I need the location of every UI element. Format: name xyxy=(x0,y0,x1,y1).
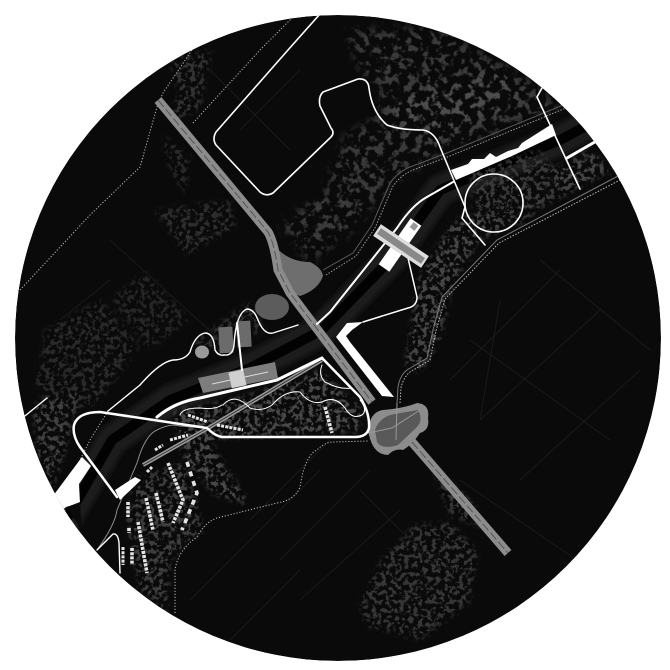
highway xyxy=(158,100,508,553)
white entry band xyxy=(55,457,91,509)
street network lines xyxy=(60,70,650,640)
river channel xyxy=(65,124,586,520)
white wedge xyxy=(336,322,394,397)
dotted paths xyxy=(20,18,368,613)
dark entry wedge xyxy=(67,502,82,526)
pavilion building xyxy=(198,362,278,393)
cross-shaped bridge xyxy=(377,222,425,268)
diagonal lane road xyxy=(143,360,322,465)
white terraced building band xyxy=(451,124,556,180)
white paths xyxy=(20,14,600,573)
tennis courts xyxy=(218,321,252,353)
vegetation: forest north of river xyxy=(280,28,560,262)
white triangle landing xyxy=(115,477,141,500)
roundabout xyxy=(368,403,428,455)
junction pond xyxy=(255,294,289,320)
junction plaza xyxy=(279,250,323,296)
vegetation: west slope, south bank, east bank xyxy=(32,50,612,640)
river-side double paths xyxy=(323,90,622,403)
grey lane west xyxy=(97,425,205,550)
small pond xyxy=(195,346,209,358)
river corridor glow xyxy=(58,114,594,532)
villas xyxy=(123,407,332,573)
